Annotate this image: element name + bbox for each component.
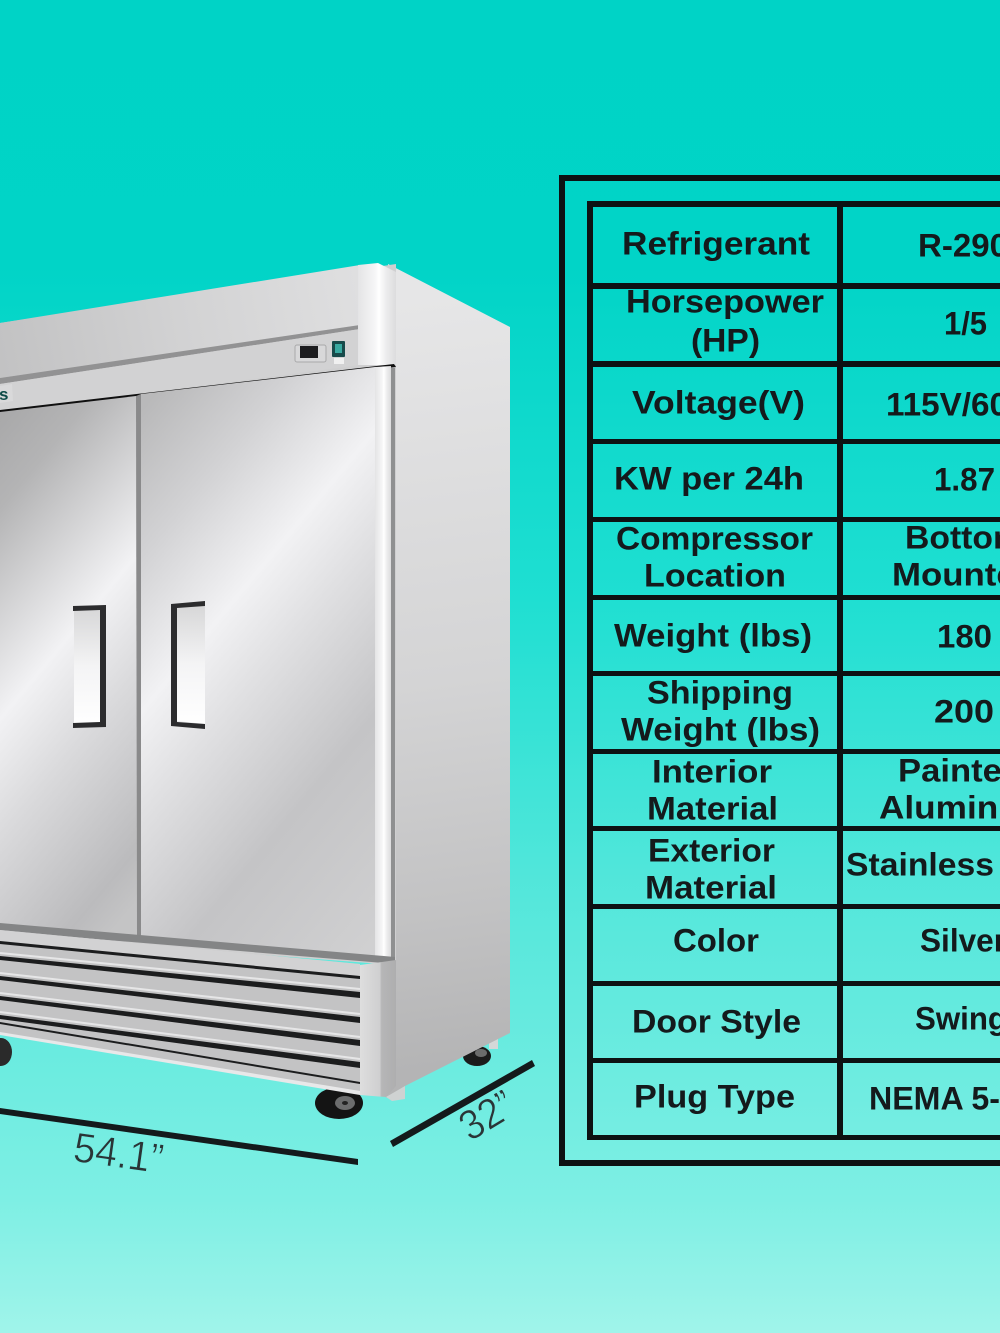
row: exterior material: Exterior: [648, 832, 775, 868]
top fascia: [0, 265, 360, 378]
rear caster: [463, 1036, 498, 1066]
row: exterior material: Stainless: [846, 846, 994, 882]
door gap: [136, 394, 141, 937]
refrigerator: [0, 263, 510, 1119]
door top seal: [0, 364, 396, 413]
base corner: [360, 960, 396, 1097]
row: weight: [614, 618, 992, 654]
louvers: [0, 941, 360, 1084]
row: refrigerant: [622, 226, 1000, 264]
front caster: [315, 1087, 363, 1119]
row: color: [673, 922, 1000, 958]
temperature display: [295, 345, 326, 362]
lower fascia band: [0, 329, 360, 412]
row: refrigerant: Refrigerant: [622, 226, 810, 262]
right door handle: [171, 601, 205, 729]
right door: [141, 367, 375, 958]
row: weight: Weight (lbs): [614, 618, 812, 654]
row: kw per 24h: [614, 460, 995, 498]
table text: [614, 226, 1000, 1116]
row: voltage: [632, 384, 1000, 422]
corner post: [358, 263, 396, 365]
brand badge: [0, 384, 13, 404]
row: voltage: Voltage(V): [632, 384, 805, 420]
left door: [0, 396, 137, 936]
depth label: 32”: [450, 1081, 523, 1150]
side panel: [386, 264, 510, 1098]
cabinet edge: [391, 368, 395, 958]
row: color: Color: [673, 922, 759, 958]
row: door style: [632, 1000, 1000, 1040]
row: interior material: Material: [647, 790, 778, 826]
row: voltage: 115V/60: [886, 386, 1000, 422]
spec table: [562, 178, 1000, 1163]
row: interior material: Interior: [652, 754, 772, 790]
front backing: [0, 264, 396, 965]
width dimension line: [0, 1108, 358, 1165]
power switch: [332, 341, 345, 364]
row: shipping weight: Shipping: [647, 674, 793, 710]
bottom strip highlight: [0, 1032, 360, 1095]
width label: 54.1”: [71, 1123, 166, 1182]
left caster: [0, 1038, 12, 1066]
row: shipping weight: Weight (lbs): [621, 712, 820, 748]
row: shipping weight: [621, 674, 994, 748]
row: compressor location: Compressor: [616, 520, 813, 556]
kick plate: [0, 930, 360, 1094]
row: kw per 24h: 1.87: [934, 462, 995, 498]
row: plug type: Plug Type: [634, 1078, 795, 1114]
door edge strip: [375, 366, 391, 958]
row: shipping weight: 200: [934, 694, 994, 730]
row: exterior material: Material: [645, 870, 777, 906]
row: plug type: [634, 1078, 1000, 1116]
row: horsepower: Horsepower: [626, 284, 824, 320]
table grid: [587, 201, 1000, 1140]
row: horsepower: 1/5: [944, 306, 987, 342]
row: weight: 180: [937, 618, 992, 654]
outer frame: [562, 178, 1000, 1163]
row: compressor location: Location: [644, 558, 786, 594]
row: plug type: NEMA 5-: [869, 1080, 1000, 1116]
row: compressor location: [616, 520, 1000, 594]
louver highlights: [0, 953, 360, 1059]
row: kw per 24h: KW per 24h: [614, 460, 804, 496]
row: door style: Door Style: [632, 1004, 801, 1040]
left door handle: [73, 605, 106, 728]
row: horsepower: [626, 284, 987, 358]
lower gasket: [0, 923, 395, 964]
fascia groove: [0, 325, 360, 384]
top panel band: [0, 930, 360, 976]
foot: [386, 1086, 405, 1101]
row: interior material: [647, 752, 1000, 826]
row: horsepower: (HP): [691, 322, 760, 358]
depth dimension line: [390, 1060, 535, 1147]
row: exterior material: [645, 832, 994, 906]
